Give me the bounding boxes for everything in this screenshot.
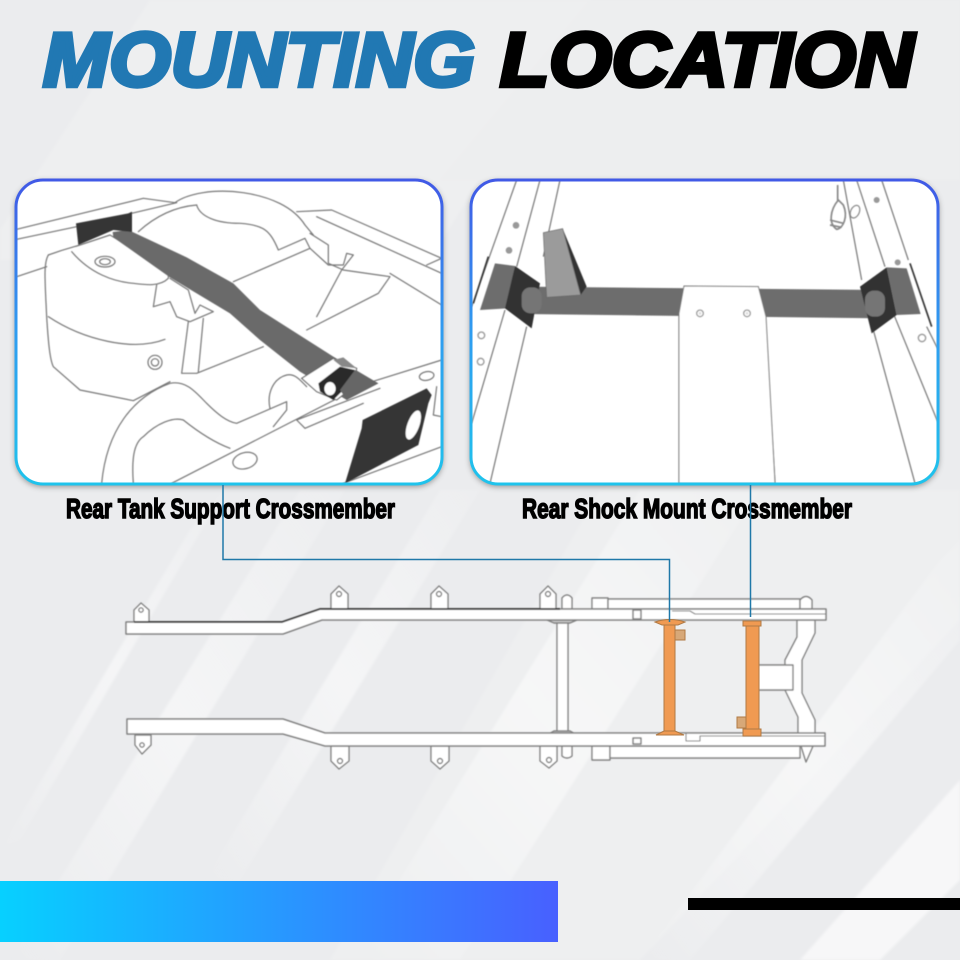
caption: rear shock mount crossmember: Rear Shock Mount Crossmember — [522, 493, 852, 524]
top frame rail — [126, 609, 826, 634]
centre plate — [679, 286, 775, 483]
chassis frame diagram — [126, 586, 826, 769]
highlighted crossmember 1 — [655, 620, 685, 735]
panel: rear tank support crossmember — [15, 180, 443, 487]
wedge bracket — [563, 229, 587, 295]
rear upper and lower tubes — [592, 596, 813, 762]
black bar — [688, 898, 960, 910]
strap clamp — [302, 358, 357, 400]
caption: rear tank support crossmember: Rear Tank Support Crossmember — [66, 493, 395, 524]
white crossmember — [547, 620, 577, 735]
strap — [113, 230, 378, 400]
illustration: shock mount crossmember — [472, 180, 938, 483]
illustration: fuel tank and strap crossmember — [17, 191, 442, 483]
rear kick crossmember — [785, 620, 815, 735]
panel: rear shock mount crossmember — [470, 180, 939, 487]
panel border — [16, 180, 442, 484]
connector line: tank crossmember — [223, 485, 670, 622]
bottom frame rail — [127, 719, 825, 746]
crossbar — [523, 287, 883, 318]
connector line: shock crossmember — [750, 485, 752, 617]
dark bracket — [76, 212, 132, 245]
panel border — [471, 180, 938, 484]
title word: MOUNTING: MOUNTING — [43, 18, 475, 103]
gradient bar — [0, 881, 558, 942]
mounting tabs — [134, 586, 572, 769]
title word: LOCATION: LOCATION — [500, 18, 916, 103]
highlighted crossmember 2 — [737, 621, 761, 736]
